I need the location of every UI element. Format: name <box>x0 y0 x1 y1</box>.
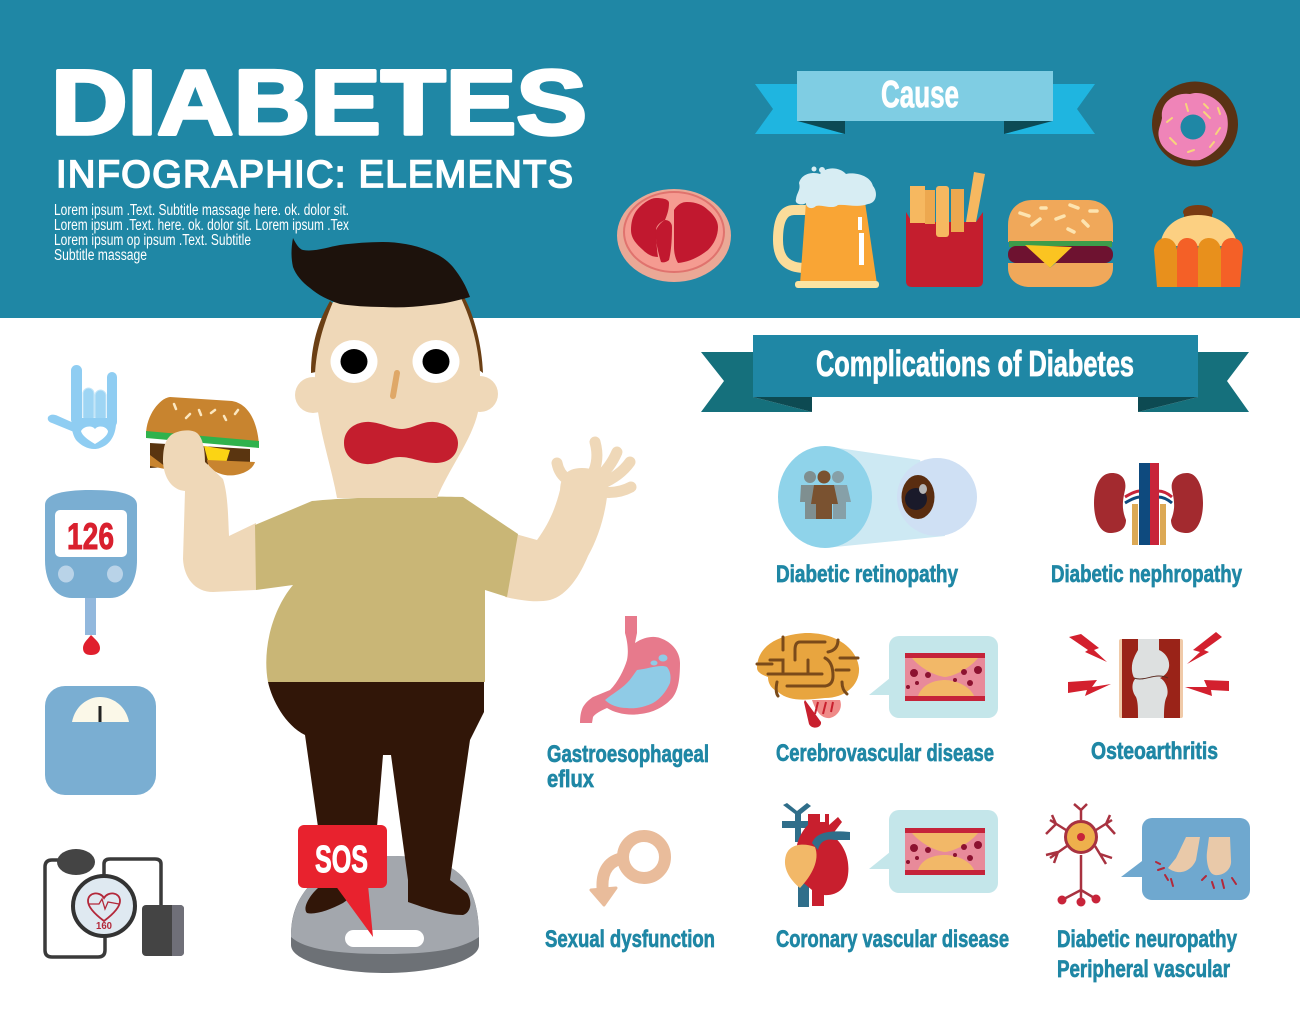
icon: blood pressure monitor <box>45 849 184 957</box>
hair <box>292 238 470 307</box>
ribbon: cause <box>755 71 1095 134</box>
nose <box>393 373 397 396</box>
callout: blocked artery (heart) <box>869 810 998 893</box>
icon: donut <box>1152 82 1238 166</box>
panel: top banner <box>0 0 1300 318</box>
icon: eye and retinopathy <box>778 446 977 548</box>
ribbon: complications of diabetes: Complications of Diabetes <box>816 343 1134 384</box>
label: coronary vascular disease: Coronary vascular disease <box>776 926 1009 953</box>
callout: blocked artery (brain) <box>869 636 998 718</box>
icon: male symbol arrow <box>591 836 665 905</box>
icon: neuron <box>1046 804 1115 906</box>
icon: heart <box>782 803 850 907</box>
icon: brain <box>757 633 859 728</box>
icon: kidneys <box>1094 463 1203 545</box>
icon: beer mug <box>778 166 879 288</box>
head <box>292 238 498 498</box>
label: gastroesophageal reflux <box>547 741 709 793</box>
label: sexual dysfunction: Sexual dysfunction <box>545 926 715 953</box>
small burger <box>146 397 259 475</box>
eyes <box>330 340 460 383</box>
SOS callout: SOS <box>315 839 368 881</box>
icon: glucose meter <box>45 490 137 655</box>
label: diabetic nephropathy: Diabetic nephropathy <box>1051 561 1243 588</box>
subtitle: INFOGRAPHIC: ELEMENTS <box>56 154 573 196</box>
icon: cupcake <box>1154 205 1243 287</box>
arm: right with open hand <box>505 442 631 601</box>
icon: blood pressure monitor: 160 <box>96 921 112 932</box>
callout: numb feet <box>1121 818 1250 900</box>
trousers and feet <box>268 682 484 915</box>
icon: hand sign <box>48 365 117 449</box>
ribbon: cause: Cause <box>881 74 959 116</box>
label: osteoarthritis: Osteoarthritis <box>1091 738 1218 765</box>
label: cerebrovascular disease: Cerebrovascular disease <box>776 740 994 767</box>
arm: left holding burger <box>146 397 259 592</box>
icon: stomach <box>580 616 680 723</box>
label: gastroesophageal reflux: Gastroesophageal <box>547 741 709 768</box>
icon: meat <box>617 189 731 282</box>
label: diabetic neuropathy peripheral vascular: Peripheral vascular <box>1057 956 1230 983</box>
intro text block <box>54 202 349 264</box>
ribbon: complications of diabetes <box>701 335 1249 412</box>
icon: burger <box>1008 200 1113 287</box>
label: diabetic neuropathy peripheral vascular: Diabetic neuropathy <box>1057 926 1237 953</box>
intro text block: Lorem ipsum .Text. Subtitle massage here. ok. dolor sit. <box>54 202 349 219</box>
intro text block: Lorem ipsum .Text. here. ok. dolor sit. Lorem ipsum .Tex <box>54 217 349 234</box>
icon: knee osteoarthritis <box>1068 632 1229 718</box>
label: diabetic retinopathy: Diabetic retinopathy <box>776 561 959 588</box>
mouth <box>344 422 458 464</box>
icon: french fries <box>906 172 985 287</box>
label: diabetic neuropathy peripheral vascular <box>1057 926 1237 983</box>
intro text block: Lorem ipsum op ipsum .Text. Subtitle <box>54 232 251 249</box>
label: gastroesophageal reflux: eflux <box>547 766 595 793</box>
shirt <box>255 497 518 682</box>
intro text block: Subtitle massage <box>54 247 147 264</box>
character: worried man on scale <box>146 238 631 973</box>
scale under feet <box>291 856 479 973</box>
title: DIABETES <box>51 52 587 154</box>
icon: glucose meter: 126 <box>67 516 114 557</box>
SOS callout <box>298 825 387 937</box>
icon: weighing scale <box>45 686 156 795</box>
